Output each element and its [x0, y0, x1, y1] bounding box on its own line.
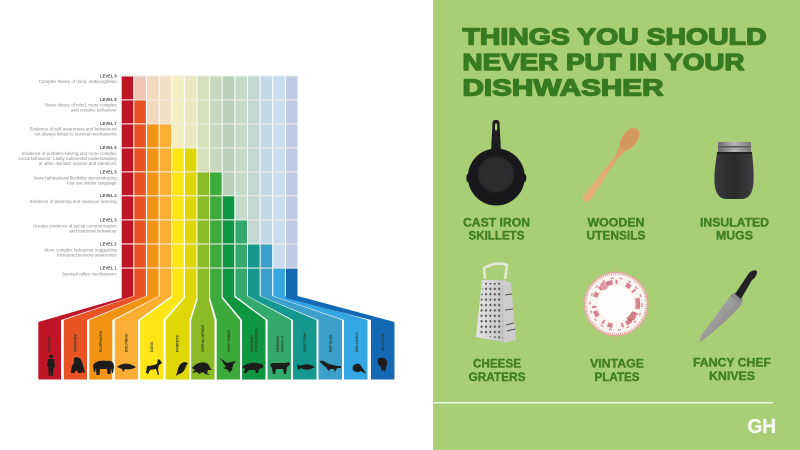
pale grid: levels not reached [134, 76, 298, 268]
label: fancy chef knives: FANCY CHEF [693, 356, 771, 370]
level descriptions: LEVEL 3 [100, 218, 117, 222]
level descriptions [18, 74, 117, 276]
icon: wooden spoon [578, 124, 643, 205]
level descriptions: of other animals' desires and intentions [39, 161, 117, 166]
icon: vintage plate [584, 272, 648, 336]
animal labels: PARROTS [176, 334, 180, 352]
level descriptions: LEVEL 5 [100, 170, 117, 174]
level descriptions: LEVEL 4 [100, 193, 117, 198]
level descriptions: LEVEL 2 [100, 242, 117, 246]
level descriptions: Complex theory of mind, metacognition [39, 79, 117, 84]
animal labels: HUMANS [48, 336, 52, 352]
level descriptions: increased sensory awareness [57, 253, 117, 258]
animal labels: HERDING [276, 336, 280, 352]
animal labels: CARNIVORES [254, 328, 258, 352]
animal labels: DOLPHINS [124, 333, 128, 352]
label: cast iron skillets: SKILLETS [468, 229, 524, 243]
animal labels: ELEPHANTS [99, 330, 103, 352]
level descriptions: Survival reflex mechanisms [62, 272, 117, 276]
level descriptions: tool use and/or language [67, 181, 117, 186]
label: insulated mugs [700, 216, 769, 243]
label: vintage plates: VINTAGE [590, 357, 644, 371]
animal labels: MOST FISH [303, 332, 307, 352]
icon: chef knife [700, 270, 757, 342]
level descriptions: Evidence of problem-solving and more complex [22, 151, 117, 156]
label: cheese graters: CHEESE [473, 357, 521, 371]
animal labels: MOLLUSCS [355, 332, 359, 352]
animal labels: REPTILES [329, 334, 333, 352]
animal labels: CEPHALOPODS [201, 324, 205, 352]
label: cheese graters: GRATERS [468, 370, 526, 384]
right panel: dishwasher guide [433, 0, 800, 450]
level descriptions: LEVEL 7 [100, 121, 117, 126]
level descriptions: LEVEL 8 [100, 97, 117, 102]
title [462, 24, 766, 101]
label: insulated mugs: MUGS [716, 229, 753, 243]
left panel: animal cognition chart [0, 0, 433, 450]
animal labels [48, 324, 385, 352]
label: fancy chef knives: KNIVES [709, 369, 755, 383]
title: DISHWASHER [462, 75, 664, 101]
label: vintage plates [590, 357, 644, 384]
animal labels: MOST BIRDS [227, 329, 231, 352]
icon: cast iron skillet [466, 120, 526, 206]
animal labels: JELLYFISH [381, 333, 385, 352]
label: cast iron skillets [463, 216, 530, 243]
title: NEVER PUT IN YOUR [462, 49, 745, 75]
label: wooden utensils: UTENSILS [586, 229, 646, 243]
level descriptions: LEVEL 6 [100, 145, 117, 150]
label: cheese graters [468, 357, 526, 384]
icon: cheese grater [476, 264, 516, 343]
level descriptions: not always linked to survival mechanisms [34, 132, 117, 137]
label: wooden utensils: WOODEN [588, 216, 644, 230]
logo: GH: GH [748, 415, 776, 438]
level descriptions: More behavioural flexibility demonstrating [34, 176, 117, 180]
level separators [118, 76, 298, 269]
level descriptions: Evidence of planning and vicarious learning [30, 199, 117, 204]
animal labels: SOLITARY [250, 334, 254, 352]
level descriptions: Greater evidence of social communication [33, 224, 117, 228]
animal labels: ANIMALS [280, 335, 284, 352]
label: insulated mugs: INSULATED [700, 216, 769, 230]
coloured columns flaring into labelled bars [38, 76, 395, 380]
level descriptions: More complex behaviour suggesting [44, 248, 117, 252]
level descriptions: and maternal behaviour [69, 229, 117, 234]
animal labels: DOGS [150, 341, 154, 352]
label: cast iron skillets: CAST IRON [463, 216, 530, 230]
level descriptions: Evidence of self-awareness and behaviours [30, 127, 117, 132]
level descriptions: social behaviour. Likely rudimental understanding [18, 156, 117, 161]
animal silhouettes [47, 355, 387, 376]
title: THINGS YOU SHOULD [462, 24, 766, 50]
label: fancy chef knives [693, 356, 771, 383]
icon: insulated mug [714, 142, 754, 199]
animal labels: PRIMATES [74, 334, 78, 352]
level descriptions: Basic theory of mind, more complex [45, 102, 117, 107]
label: vintage plates: PLATES [594, 370, 640, 384]
level descriptions: LEVEL 9 [100, 74, 117, 78]
level descriptions: and creative behaviour [71, 108, 117, 113]
level descriptions: LEVEL 1 [100, 266, 117, 270]
label: wooden utensils [586, 216, 646, 243]
